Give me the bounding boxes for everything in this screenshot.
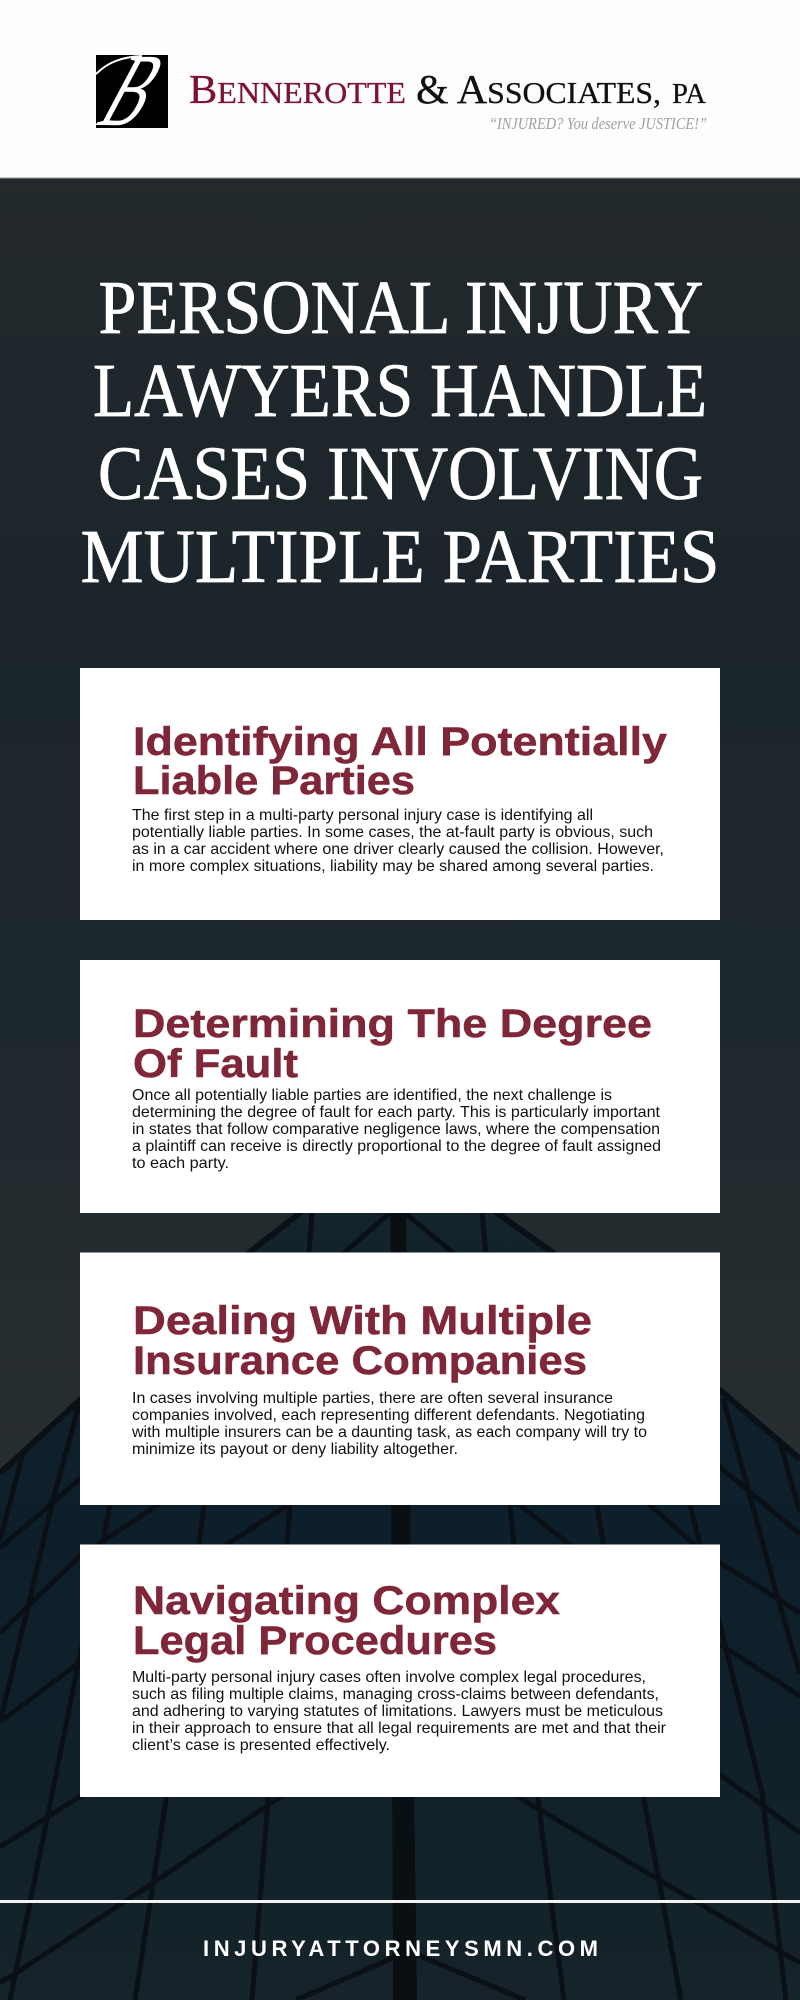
body text: such as filing multiple claims, managing cross-claims between defendants, — [132, 1686, 659, 1703]
title: CASES INVOLVING — [98, 432, 703, 516]
background: dark building photo — [0, 1213, 800, 2000]
footer website: INJURYATTORNEYSMN.COM — [203, 1936, 598, 1961]
panel: complex legal procedures — [80, 1544, 720, 1797]
panel: multiple insurance companies — [80, 1252, 720, 1505]
body text: in more complex situations, liability may be shared among several parties. — [132, 858, 654, 875]
body text: a plaintiff can receive is directly proportional to the degree of fault assigned — [132, 1138, 661, 1155]
firm name — [189, 66, 707, 112]
firm name: BENNEROTTE — [189, 66, 406, 112]
body text — [132, 1087, 661, 1172]
logo monogram — [96, 55, 168, 128]
panel: determining degree of fault — [80, 960, 720, 1213]
firm name: & ASSOCIATES, — [416, 66, 661, 112]
heading — [133, 1299, 592, 1383]
body text — [131, 1390, 647, 1458]
body text: and adhering to varying statutes of limitations. Lawyers must be meticulous — [132, 1703, 663, 1720]
tagline: “INJURED? You deserve JUSTICE!” — [489, 114, 707, 133]
body text: Multi-party personal injury cases often involve complex legal procedures, — [132, 1669, 646, 1686]
heading — [133, 720, 668, 803]
body text: client’s case is presented effectively. — [132, 1737, 390, 1754]
heading — [133, 1002, 652, 1086]
heading: Determining The Degree — [133, 1002, 652, 1046]
title — [80, 266, 720, 599]
heading: Navigating Complex — [133, 1579, 560, 1623]
body text: The first step in a multi-party personal injury case is identifying all — [132, 807, 593, 824]
body text: determining the degree of fault for each party. This is particularly important — [132, 1104, 661, 1121]
heading: Identifying All Potentially — [133, 720, 668, 764]
heading: Of Fault — [133, 1042, 298, 1086]
body text: In cases involving multiple parties, there are often several insurance — [132, 1390, 613, 1407]
heading: Insurance Companies — [133, 1339, 587, 1383]
title: MULTIPLE PARTIES — [80, 515, 720, 599]
body text: companies involved, each representing different defendants. Negotiating — [132, 1407, 645, 1424]
body text: in states that follow comparative negligence laws, where the compensation — [132, 1121, 660, 1138]
heading: Liable Parties — [133, 759, 415, 803]
footer divider — [0, 1900, 800, 1903]
body text: in their approach to ensure that all legal requirements are met and that their — [132, 1720, 667, 1737]
heading: Legal Procedures — [133, 1619, 497, 1663]
body text: to each party. — [132, 1155, 229, 1172]
panel: identifying liable parties — [80, 668, 720, 920]
logo monogram: B — [82, 33, 184, 148]
firm name: PA — [672, 79, 707, 110]
body text: Once all potentially liable parties are identified, the next challenge is — [132, 1087, 612, 1104]
title: LAWYERS HANDLE — [93, 349, 707, 433]
body text: minimize its payout or deny liability altogether. — [132, 1441, 458, 1458]
body text — [132, 1669, 667, 1754]
body text: potentially liable parties. In some cases, the at-fault party is obvious, such — [132, 824, 653, 841]
heading: Dealing With Multiple — [133, 1299, 592, 1343]
body text — [132, 807, 664, 875]
heading — [133, 1579, 560, 1663]
title: PERSONAL INJURY — [98, 266, 704, 350]
body text: with multiple insurers can be a daunting task, as each company will try to — [131, 1424, 647, 1441]
header bar — [0, 0, 800, 178]
body text: as in a car accident where one driver clearly caused the collision. However, — [132, 841, 664, 858]
